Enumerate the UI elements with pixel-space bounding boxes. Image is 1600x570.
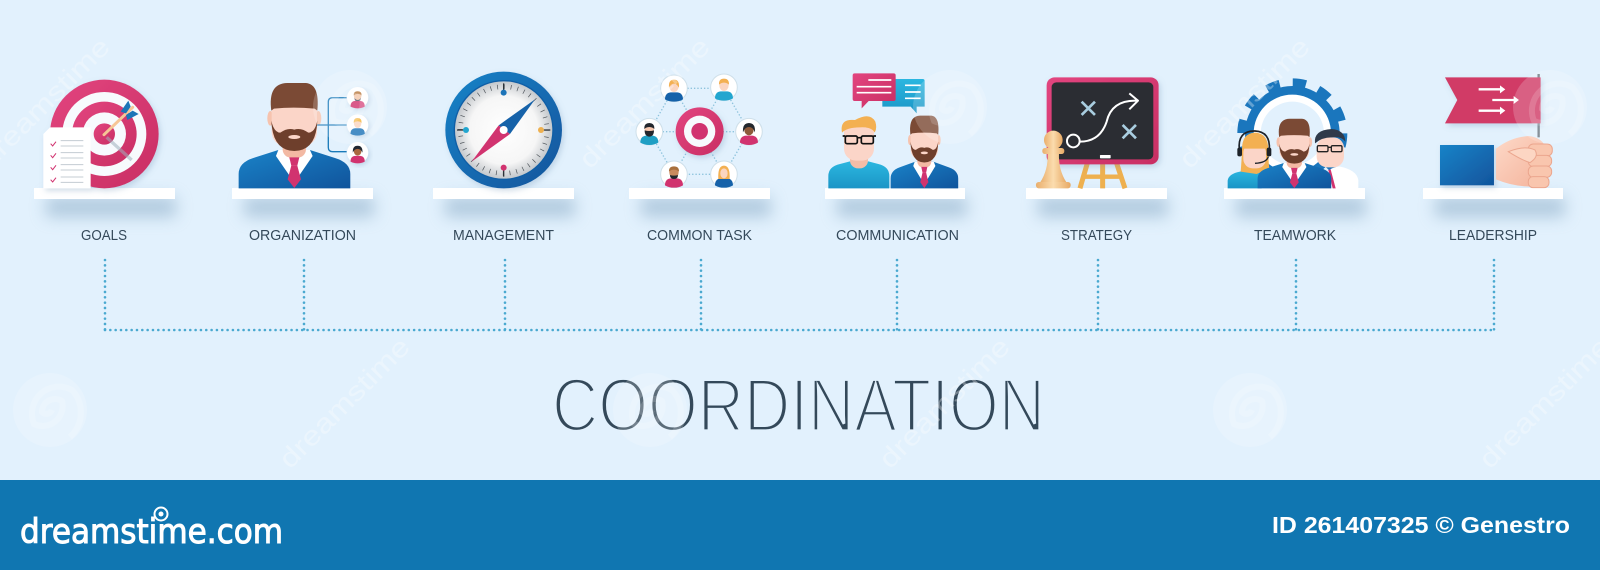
dotted connector [105, 260, 1494, 330]
watermarks: dreamstime [1473, 331, 1600, 474]
shelf [825, 188, 967, 217]
panel: teamwork [1224, 83, 1366, 244]
shelf [34, 188, 176, 217]
panel: communication [825, 73, 967, 244]
watermarks: dreamstime [873, 331, 1016, 474]
shelf [629, 188, 771, 217]
watermarks: dreamstime [1173, 31, 1316, 174]
shelf [1224, 188, 1366, 217]
image id and credit: ID 261407325 © Genestro [1272, 512, 1570, 538]
watermarks: dreamstime [273, 331, 416, 474]
label: ORGANIZATION [249, 227, 356, 244]
label: COMMON TASK [647, 227, 752, 244]
panel: management [433, 72, 575, 244]
watermarks: dreamstime [573, 31, 716, 174]
icon: compass [445, 72, 562, 188]
icon: chalkboard and pawn [1036, 77, 1159, 188]
panel: strategy [1026, 77, 1168, 244]
watermarks [0, 31, 1600, 474]
label: COMMUNICATION [836, 227, 959, 244]
label: STRATEGY [1061, 227, 1132, 244]
panel: leadership [1423, 74, 1565, 244]
shelf [433, 188, 575, 217]
icon: target with checklist [43, 80, 159, 188]
shelf [1026, 188, 1168, 217]
panel: organization [232, 83, 374, 244]
panel: common task [629, 74, 771, 244]
icon: team with gear [1228, 83, 1358, 188]
panel: goals [34, 80, 176, 244]
icon: manager with org chart [239, 83, 368, 188]
shelf [1423, 188, 1565, 217]
icon: team around target [636, 74, 762, 188]
label: TEAMWORK [1254, 227, 1336, 244]
label: GOALS [81, 227, 127, 244]
title: COORDINATION [552, 363, 1045, 447]
icon: fist holding flag [1440, 74, 1552, 188]
label: MANAGEMENT [453, 227, 554, 244]
dreamstime logo: dreamstime.com [20, 512, 283, 552]
icon: two people talking [828, 73, 958, 188]
label: LEADERSHIP [1449, 227, 1537, 244]
shelf [232, 188, 374, 217]
bottom band [0, 480, 1600, 570]
